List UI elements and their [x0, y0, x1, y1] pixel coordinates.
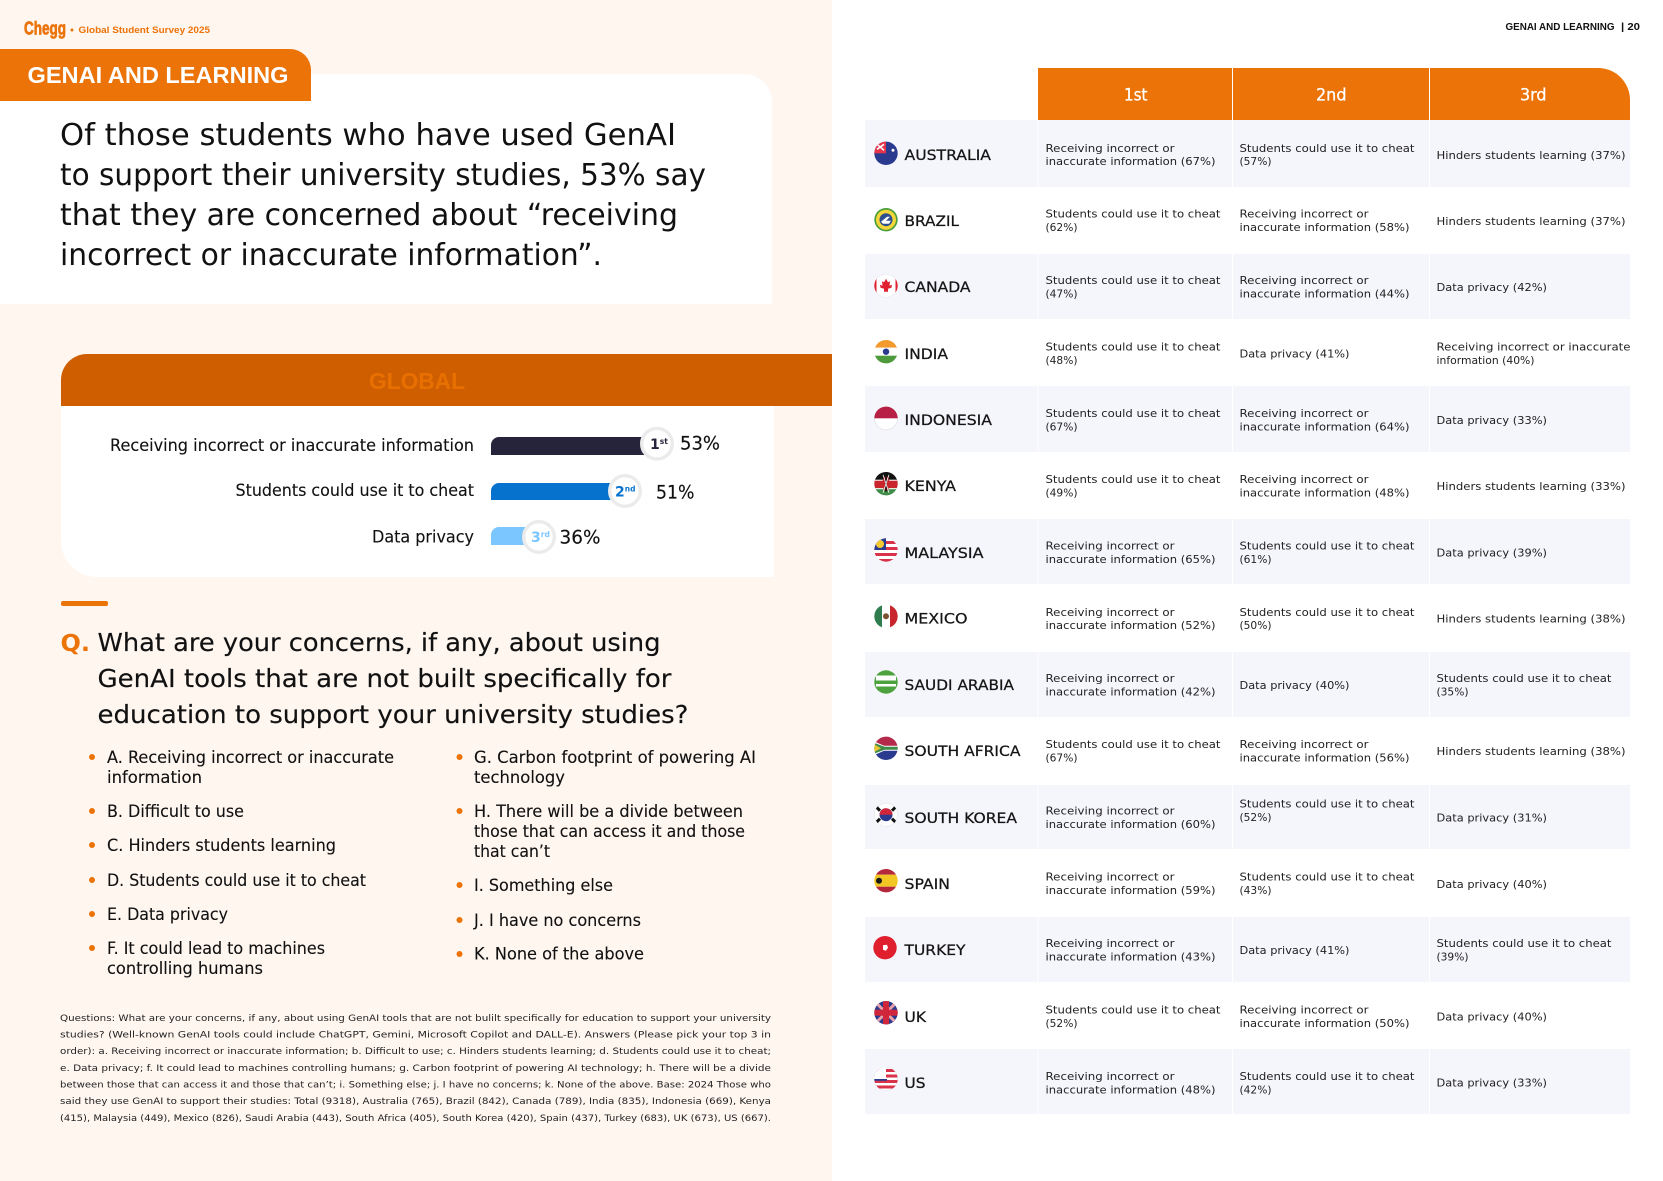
- icon: Indonesia flag: [874, 406, 898, 430]
- bar: receiving incorrect information: [110, 428, 720, 459]
- row: India: information (40%): [1436, 354, 1534, 367]
- row: Spain: Data privacy (40%): [1436, 878, 1547, 891]
- row: South Korea: SOUTH KOREA: [904, 811, 1017, 827]
- icon: Spain flag: [874, 869, 898, 893]
- row: Spain: inaccurate information (59%): [1046, 884, 1216, 897]
- row: Australia: (57%): [1240, 155, 1272, 168]
- row: Indonesia: [874, 406, 1547, 433]
- row: US: Data privacy (33%): [1436, 1077, 1547, 1090]
- row: US: inaccurate information (48%): [1046, 1083, 1216, 1096]
- row: Malaysia: Receiving incorrect or: [1046, 540, 1175, 552]
- row: India: (48%): [1046, 354, 1078, 367]
- row: Kenya: Hinders students learning (33%): [1436, 480, 1626, 493]
- row: Saudi Arabia: inaccurate information (42%): [1046, 686, 1216, 698]
- icon: US flag: [874, 1067, 898, 1090]
- headline text: [60, 118, 706, 273]
- answer list: left column: D. Students could use it to cheat: [107, 871, 366, 890]
- row: India: Data privacy (41%): [1240, 348, 1350, 360]
- question heading: GenAI tools that are not built specifically for: [98, 664, 672, 693]
- answer list: left column: A. Receiving incorrect or inaccurate: [107, 748, 394, 767]
- running header: section and page number: | 20: [1621, 22, 1640, 33]
- row: US: US: [904, 1076, 926, 1092]
- row: UK: (52%): [1046, 1017, 1078, 1030]
- bar: students could cheat: [236, 476, 694, 506]
- bar: receiving incorrect information: Receiving incorrect or inaccurate information: [110, 436, 474, 455]
- global heading: GLOBAL: [369, 368, 465, 394]
- row: South Korea: Receiving incorrect or: [1046, 805, 1175, 818]
- bar: students could cheat: Students could use it to cheat: [236, 481, 475, 500]
- row: UK: Receiving incorrect or: [1240, 1004, 1369, 1017]
- headline text: incorrect or inaccurate information”.: [60, 238, 602, 273]
- row: Turkey: Students could use it to cheat: [1436, 937, 1612, 950]
- panel: headline card: [0, 74, 772, 304]
- answer list: left column: information: [107, 768, 202, 787]
- bar: receiving incorrect information: 53%: [680, 432, 720, 454]
- table row bands: [865, 120, 1630, 1115]
- bar: students could cheat: nd: [625, 484, 635, 494]
- row: Canada: (47%): [1046, 287, 1078, 300]
- icon: Mexico flag: [874, 604, 898, 628]
- question heading: education to support your university studies?: [98, 700, 688, 729]
- row: Kenya: [874, 472, 1626, 500]
- row: Saudi Arabia: Receiving incorrect or: [1046, 672, 1175, 685]
- row: Turkey: TURKEY: [903, 943, 966, 959]
- row: Canada: Receiving incorrect or: [1240, 274, 1369, 287]
- row: Turkey: Data privacy (41%): [1240, 944, 1350, 957]
- row: Saudi Arabia: Students could use it to cheat: [1436, 672, 1612, 685]
- row: South Korea: Data privacy (31%): [1436, 812, 1547, 824]
- icon: Turkey flag: [873, 936, 897, 960]
- row: Kenya: Receiving incorrect or: [1240, 473, 1369, 486]
- table header: 3rd: [1520, 86, 1546, 104]
- header: Chegg survey label: Global Student Survey 2025: [78, 25, 211, 36]
- row: Mexico: Hinders students learning (38%): [1436, 613, 1626, 626]
- row: Indonesia: Receiving incorrect or: [1240, 407, 1369, 420]
- answer list: right column: that can’t: [474, 842, 551, 861]
- header: Chegg survey label: [24, 18, 211, 38]
- row: US: Students could use it to cheat: [1240, 1070, 1415, 1083]
- icon: Canada flag: [874, 274, 898, 298]
- answer list: right column: J. I have no concerns: [473, 911, 641, 930]
- global header band: [61, 354, 832, 406]
- row: Spain: [874, 869, 1547, 897]
- row: Indonesia: Data privacy (33%): [1436, 414, 1547, 427]
- row: Indonesia: INDONESIA: [904, 413, 992, 429]
- row: Spain: SPAIN: [904, 877, 950, 893]
- icon: Australia flag: [874, 141, 898, 165]
- answer list: left column: controlling humans: [107, 959, 263, 978]
- row: India: INDIA: [904, 347, 948, 363]
- row: Turkey: inaccurate information (43%): [1046, 950, 1216, 963]
- row: UK: Data privacy (40%): [1436, 1010, 1547, 1023]
- panel: left page background: [0, 0, 832, 1181]
- row: Australia: Students could use it to cheat: [1240, 142, 1415, 155]
- question heading: [60, 628, 688, 729]
- icon: South Korea flag: [874, 803, 898, 826]
- row: South Africa: SOUTH AFRICA: [904, 744, 1021, 760]
- row: Saudi Arabia: SAUDI ARABIA: [904, 678, 1014, 694]
- row: UK: UK: [904, 1010, 927, 1026]
- bar: data privacy: [372, 522, 600, 552]
- bar: data privacy: Data privacy: [372, 528, 474, 546]
- footnote: survey question and base: between those that can access it and those that can’t; i. Something else; j. I have no concerns; k. None of the above. Base: 2024 Those who: [60, 1080, 772, 1090]
- row: Turkey: Receiving incorrect or: [1046, 937, 1175, 950]
- row: Saudi Arabia: Data privacy (40%): [1240, 679, 1350, 692]
- row: Saudi Arabia: [874, 670, 1612, 698]
- row: Malaysia: [874, 538, 1547, 566]
- icon: India flag: [875, 340, 897, 364]
- row: Kenya: Students could use it to cheat: [1046, 473, 1221, 486]
- row: Brazil: [874, 208, 1626, 234]
- row: Brazil: Receiving incorrect or: [1240, 208, 1369, 221]
- answer list: left column: [89, 748, 394, 978]
- header: Chegg survey label: Chegg: [24, 18, 66, 38]
- row: Malaysia: (61%): [1240, 553, 1272, 566]
- row: India: [874, 340, 1631, 367]
- row: Saudi Arabia: (35%): [1436, 686, 1468, 698]
- row: Australia: inaccurate information (67%): [1046, 155, 1216, 168]
- bar: students could cheat: 2: [615, 484, 625, 500]
- bar: receiving incorrect information: 1: [650, 437, 660, 453]
- row: Brazil: BRAZIL: [904, 214, 959, 230]
- row: Malaysia: inaccurate information (65%): [1046, 553, 1216, 566]
- row: Malaysia: MALAYSIA: [904, 546, 984, 562]
- row: India: Students could use it to cheat: [1046, 341, 1221, 354]
- icon: South Africa flag: [874, 736, 898, 760]
- section tab: GenAI and Learning: GENAI AND LEARNING: [28, 62, 288, 88]
- row: South Africa: inaccurate information (56%): [1240, 752, 1410, 765]
- table header: 2nd: [1316, 86, 1346, 104]
- row: Malaysia: Data privacy (39%): [1436, 546, 1547, 559]
- row: Indonesia: (67%): [1046, 420, 1078, 433]
- table header: 1st: [1124, 86, 1148, 104]
- row: Australia: AUSTRALIA: [904, 148, 991, 164]
- row: Kenya: (49%): [1046, 487, 1078, 500]
- row: Canada: inaccurate information (44%): [1240, 287, 1410, 300]
- icon: Malaysia flag: [874, 538, 898, 562]
- row: Australia: [874, 141, 1626, 168]
- answer list: right column: technology: [474, 768, 565, 787]
- row: Canada: CANADA: [904, 280, 971, 296]
- row: US: (42%): [1240, 1083, 1272, 1096]
- answer list: left column: E. Data privacy: [107, 905, 228, 924]
- bar: data privacy: 36%: [560, 526, 600, 548]
- answer list: left column: F. It could lead to machines: [107, 939, 325, 958]
- row: UK: [874, 1001, 1547, 1030]
- row: UK: inaccurate information (50%): [1240, 1017, 1410, 1030]
- row: Mexico: Receiving incorrect or: [1046, 606, 1175, 619]
- answer list: right column: I. Something else: [474, 876, 613, 895]
- row: Brazil: inaccurate information (58%): [1240, 221, 1410, 234]
- section tab: GenAI and Learning: [0, 49, 311, 101]
- bar: data privacy: 3: [531, 530, 541, 546]
- row: Brazil: Hinders students learning (37%): [1436, 215, 1626, 228]
- icon: Saudi Arabia flag: [874, 670, 898, 694]
- footnote: survey question and base: Questions: What are your concerns, if any, about using GenAI tools that are not bulilt specifically for education to support your university: [60, 1014, 772, 1024]
- footnote: survey question and base: order): a. Receiving incorrect or inaccurate information; b. Difficult to use; c. Hinders students learning; d. Students could use it to cheat;: [60, 1047, 771, 1057]
- row: UK: Students could use it to cheat: [1046, 1004, 1221, 1017]
- answer list: right column: G. Carbon footprint of powering AI: [474, 748, 756, 767]
- row: Indonesia: Students could use it to cheat: [1046, 407, 1221, 420]
- row: US: [874, 1067, 1547, 1096]
- row: Australia: Receiving incorrect or: [1046, 142, 1175, 155]
- row: Brazil: Students could use it to cheat: [1046, 208, 1221, 221]
- icon: UK flag: [874, 1001, 898, 1025]
- footnote: survey question and base: e. Data privacy; f. It could lead to machines controlling humans; g. Carbon footprint of powering AI technology; h. There will be a divide: [60, 1064, 772, 1074]
- bar: receiving incorrect information: st: [660, 437, 668, 446]
- row: South Africa: (67%): [1046, 752, 1078, 765]
- row: South Africa: Students could use it to cheat: [1046, 738, 1221, 751]
- bar: students could cheat: 51%: [656, 482, 694, 504]
- row: Kenya: inaccurate information (48%): [1240, 487, 1410, 500]
- footnote: survey question and base: (415), Malaysia (449), Mexico (826), Saudi Arabia (443), South Africa (405), South Korea (420), Spain (437), Turkey (683), UK (673), US (667).: [60, 1114, 771, 1124]
- icon: Kenya flag: [874, 472, 898, 496]
- row: South Africa: Hinders students learning (38%): [1436, 745, 1626, 758]
- icon: Brazil flag: [874, 208, 898, 232]
- headline text: that they are concerned about “receiving: [60, 198, 678, 233]
- running header: section and page number: GENAI AND LEARNING: [1506, 22, 1615, 33]
- row: Turkey: (39%): [1436, 950, 1468, 963]
- row: South Africa: [874, 736, 1626, 765]
- row: South Africa: Receiving incorrect or: [1240, 738, 1369, 751]
- footnote: survey question and base: studies? (Well-known GenAI tools could include ChatGPT, Gemini, Microsoft Copilot and DALL-E). Answers (Please pick your top 3 in: [60, 1030, 771, 1040]
- row: South Korea: [874, 800, 1546, 830]
- row: South Korea: inaccurate information (60%): [1046, 818, 1216, 831]
- row: Canada: [874, 274, 1547, 300]
- row: Spain: (43%): [1240, 884, 1272, 897]
- row: Mexico: (50%): [1240, 619, 1272, 632]
- answer list: left column: C. Hinders students learning: [107, 836, 336, 855]
- row: Spain: Students could use it to cheat: [1240, 871, 1415, 884]
- row: Brazil: (62%): [1046, 221, 1078, 234]
- row: Australia: Hinders students learning (37%): [1436, 149, 1626, 162]
- answer list: right column: those that can access it and those: [474, 822, 745, 841]
- row: Mexico: inaccurate information (52%): [1046, 619, 1216, 632]
- question heading: What are your concerns, if any, about using: [98, 628, 660, 657]
- row: Mexico: Students could use it to cheat: [1240, 606, 1415, 619]
- row: Malaysia: Students could use it to cheat: [1240, 540, 1415, 552]
- answer list: right column: [456, 748, 756, 964]
- row: Mexico: MEXICO: [904, 612, 968, 628]
- headline text: Of those students who have used GenAI: [60, 118, 676, 153]
- table header: [1038, 68, 1630, 120]
- row: South Korea: (52%): [1240, 811, 1272, 824]
- footnote: survey question and base: [60, 1014, 772, 1124]
- bar: data privacy: rd: [541, 530, 550, 539]
- row: South Korea: Students could use it to cheat: [1240, 798, 1415, 810]
- footnote: survey question and base: said they use GenAI to support their studies: Total (9318), Australia (765), Brazil (842), Canada (789), India (835), Indonesia (669), Kenya: [60, 1097, 771, 1107]
- row: Spain: Receiving incorrect or: [1046, 871, 1175, 884]
- row: India: Receiving incorrect or inaccurate: [1436, 341, 1631, 354]
- row: Indonesia: inaccurate information (64%): [1240, 420, 1410, 433]
- row: Canada: Students could use it to cheat: [1046, 274, 1221, 287]
- headline text: to support their university studies, 53% say: [60, 158, 706, 193]
- accent rule: [61, 601, 108, 606]
- row: Canada: Data privacy (42%): [1436, 281, 1547, 294]
- question heading: Q.: [60, 631, 90, 657]
- row: Turkey: [873, 936, 1612, 963]
- answer list: left column: B. Difficult to use: [107, 802, 244, 821]
- row: Mexico: [874, 604, 1626, 632]
- answer list: right column: H. There will be a divide between: [474, 802, 743, 821]
- panel: global chart: [61, 354, 832, 577]
- row: Kenya: KENYA: [904, 479, 956, 495]
- row: US: Receiving incorrect or: [1046, 1070, 1175, 1083]
- answer list: right column: K. None of the above: [474, 944, 644, 964]
